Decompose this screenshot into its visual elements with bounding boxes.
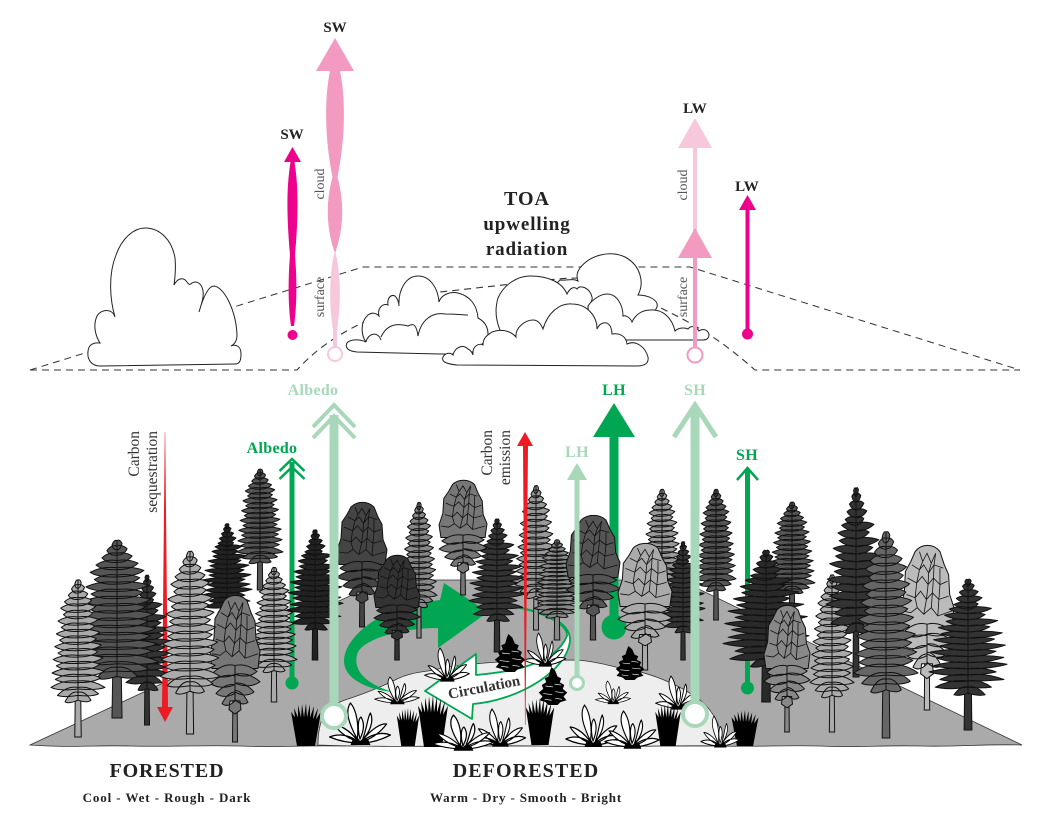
deforested cloud group	[346, 254, 709, 366]
circulation arrow: green rising	[344, 583, 488, 692]
circulation arrow: white returning: Circulation	[447, 673, 522, 703]
trees: forested left stand	[51, 469, 343, 742]
arrow: SH deforested	[674, 382, 716, 726]
arrow: SH forested: SH	[736, 447, 758, 464]
arrow: SW deforested: cloud	[313, 168, 328, 200]
circulation arrow: white returning	[425, 608, 570, 719]
label: forested	[83, 760, 251, 805]
TOA heading	[483, 188, 571, 260]
dashed boundary: inner surface layer	[30, 278, 1020, 370]
arrow: albedo deforested	[288, 382, 355, 728]
arrow: LW deforested	[676, 101, 712, 362]
arrow: LH forested: LH	[565, 444, 589, 461]
trees: central background stand	[337, 480, 736, 670]
arrow: LH deforested: LH	[602, 382, 626, 399]
arrow: LH deforested	[593, 382, 635, 640]
label: deforested	[430, 760, 622, 805]
label: forested: Cool - Wet - Rough - Dark	[83, 790, 251, 805]
deforested clearing	[318, 660, 724, 747]
arrow: carbon emission	[479, 430, 533, 725]
arrow: albedo deforested: Albedo	[288, 382, 338, 399]
TOA heading: radiation	[486, 239, 568, 260]
arrow: carbon sequestration	[126, 431, 173, 722]
arrow: LW forested: LW	[735, 179, 759, 195]
label: deforested: DEFORESTED	[453, 760, 599, 782]
dashed boundary: outer TOA layer	[30, 267, 1020, 370]
arrow: SH forested	[736, 447, 758, 694]
arrow: albedo forested	[247, 440, 304, 690]
arrow: albedo forested: Albedo	[247, 440, 297, 457]
arrow: SW forested: SW	[280, 127, 304, 143]
arrow: LW deforested: LW	[683, 101, 707, 117]
arrow: carbon emission: Carbon	[479, 430, 496, 476]
arrow: carbon emission: emission	[497, 430, 514, 485]
trees: forested right stand	[723, 488, 1007, 738]
TOA heading: upwelling	[483, 214, 571, 235]
arrow: LW forested	[735, 179, 759, 340]
arrow: LH forested	[565, 444, 589, 690]
TOA heading: TOA	[504, 188, 550, 210]
arrow: SW deforested: surface	[313, 277, 328, 317]
arrow: LW deforested: cloud	[676, 169, 691, 201]
shrubs and grasses in clearing	[291, 633, 758, 751]
label: deforested: Warm - Dry - Smooth - Bright	[430, 790, 622, 805]
arrow: SW deforested: SW	[323, 20, 347, 36]
ground	[30, 580, 1022, 747]
arrow: SH deforested: SH	[684, 382, 706, 399]
arrow: SW deforested	[313, 20, 354, 361]
arrow: LW deforested: surface	[676, 277, 691, 317]
label: forested: FORESTED	[109, 760, 225, 782]
arrow: SW forested	[280, 127, 304, 340]
arrow: carbon sequestration: sequestration	[144, 431, 161, 513]
forested cloud	[88, 228, 241, 366]
arrow: carbon sequestration: Carbon	[126, 431, 143, 477]
